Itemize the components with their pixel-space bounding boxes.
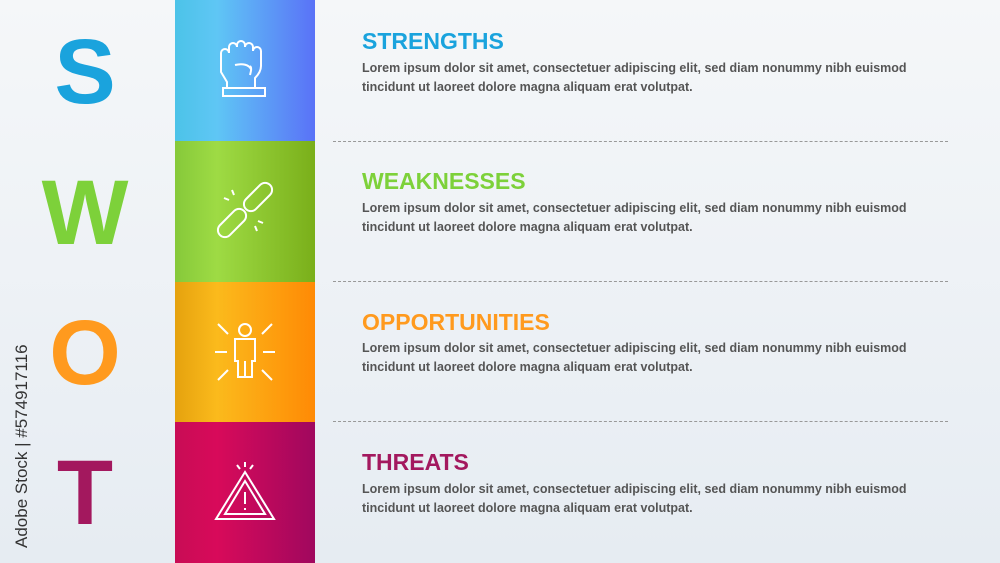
icon: warning triangle bbox=[214, 462, 276, 520]
heading: strengths: STRENGTHS bbox=[362, 28, 504, 54]
text: strengths: Lorem ipsum dolor sit amet, consectetuer adipiscing elit, sed diam nonummy nibh euismod tincidunt ut laoreet dolore magna aliquam erat volutpat. bbox=[362, 61, 907, 94]
letter W: W bbox=[42, 162, 128, 264]
panel: weaknesses bbox=[175, 141, 315, 282]
text: weaknesses: Lorem ipsum dolor sit amet, consectetuer adipiscing elit, sed diam nonummy nibh euismod tincidunt ut laoreet dolore magna aliquam erat volutpat. bbox=[362, 201, 907, 234]
text: opportunities: Lorem ipsum dolor sit amet, consectetuer adipiscing elit, sed diam nonummy nibh euismod tincidunt ut laoreet dolore magna aliquam erat volutpat. bbox=[362, 341, 907, 374]
heading: weaknesses: WEAKNESSES bbox=[362, 168, 526, 194]
heading: threats: THREATS bbox=[362, 449, 469, 475]
letter T: T bbox=[57, 442, 113, 544]
icon: person with arrows bbox=[215, 323, 275, 381]
icon: fist bbox=[220, 40, 266, 97]
panel: opportunities bbox=[175, 282, 315, 422]
letter S: S bbox=[54, 21, 116, 123]
panel: strengths bbox=[175, 0, 315, 141]
text: threats: Lorem ipsum dolor sit amet, consectetuer adipiscing elit, sed diam nonummy nibh euismod tincidunt ut laoreet dolore magna aliquam erat volutpat. bbox=[362, 482, 907, 515]
icon: broken chain bbox=[216, 182, 274, 238]
heading: opportunities: OPPORTUNITIES bbox=[362, 309, 550, 335]
panel: threats bbox=[175, 422, 315, 563]
vertical watermark text: Adobe Stock | #574917116 bbox=[12, 344, 31, 548]
letter O: O bbox=[49, 302, 121, 404]
